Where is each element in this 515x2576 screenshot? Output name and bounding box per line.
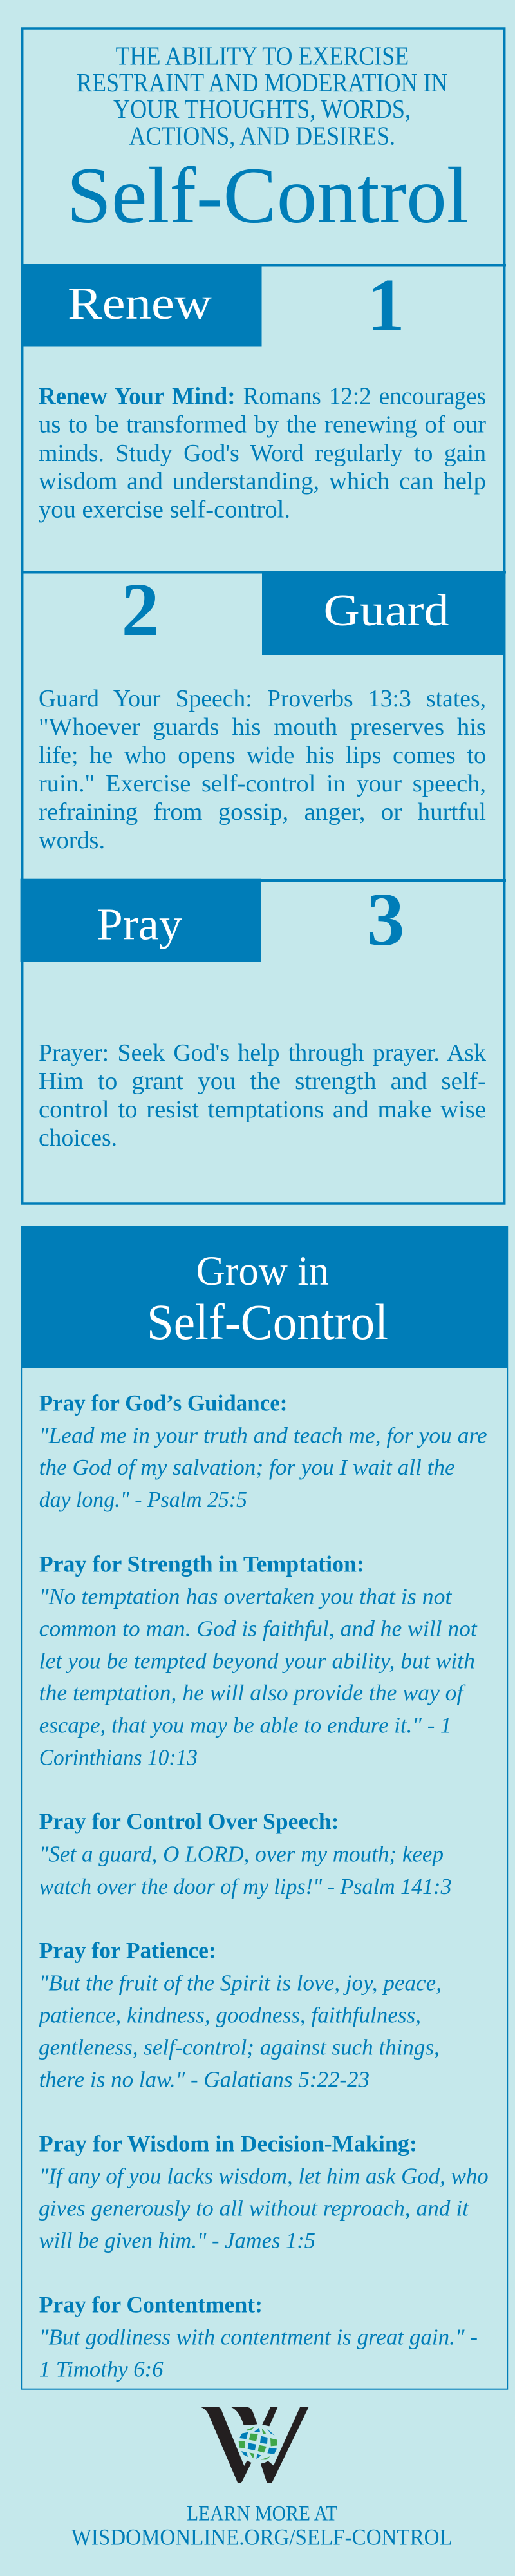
prayer: guidance: Pray for God’s Guidance: — [39, 1390, 287, 1416]
prayer: wisdom in decision-making: gives generously to all without reproach, and it — [39, 2196, 469, 2221]
prayer: guidance: "Lead me in your truth and teach me, for you are — [39, 1423, 487, 1448]
step 3 body text: choices. — [39, 1124, 117, 1151]
step 3 band: Pray — [21, 879, 261, 962]
prayer: strength in temptation: Corinthians 10:13 — [39, 1745, 198, 1770]
prayer: strength in temptation: escape, that you may be able to endure it." - 1 — [39, 1713, 451, 1738]
step 3 body text: Him to grant you the strength and self- — [39, 1068, 486, 1095]
prayer: control over speech: Pray for Control Over Speech: — [39, 1808, 339, 1834]
icon: Wisdom Online W and globe logo — [201, 2407, 308, 2483]
step 2 body text: words. — [39, 827, 105, 854]
step 2 band: Guard: Guard — [323, 586, 449, 636]
prayer: strength in temptation: "No temptation has overtaken you that is not — [39, 1584, 453, 1609]
step 2 body text: refraining from gossip, anger, or hurtful — [39, 799, 486, 826]
definition text: THE ABILITY TO EXERCISE — [116, 41, 409, 71]
prayer: control over speech — [39, 1808, 451, 1899]
definition text — [77, 41, 448, 151]
prayer: strength in temptation: Pray for Strength in Temptation: — [39, 1551, 364, 1577]
panel frame — [23, 28, 505, 1204]
prayer: guidance: the God of my salvation; for you I wait all the — [39, 1455, 455, 1480]
prayer: contentment — [39, 2292, 478, 2382]
prayer: wisdom in decision-making — [39, 2131, 489, 2253]
definition text: YOUR THOUGHTS, WORDS, — [113, 94, 411, 124]
definition text: ACTIONS, AND DESIRES. — [129, 121, 395, 151]
prayer: wisdom in decision-making: will be given him." - James 1:5 — [39, 2228, 315, 2253]
footer call to action: WISDOMONLINE.ORG/SELF-CONTROL — [71, 2524, 453, 2550]
step 3 body text: Prayer: Seek God's help through prayer. Ask — [39, 1039, 486, 1066]
prayer: contentment: "But godliness with contentment is great gain." - — [39, 2325, 478, 2350]
footer call to action — [71, 2503, 453, 2550]
prayer: patience: patience, kindness, goodness, faithfulness, — [37, 2003, 421, 2028]
prayer: patience: "But the fruit of the Spirit is love, joy, peace, — [39, 1971, 442, 1996]
step 2 body text: life; he who opens wide his lips comes to — [39, 742, 486, 769]
prayer: wisdom in decision-making: Pray for Wisdom in Decision-Making: — [39, 2131, 417, 2157]
prayer: patience: gentleness, self-control; against such things, — [39, 2035, 440, 2060]
step 3 band: Pray: Pray — [97, 900, 182, 949]
step 2 body text: "Whoever guards his mouth preserves his — [39, 714, 486, 741]
step 2 body text: ruin." Exercise self-control in your speech, — [39, 770, 486, 797]
prayer: patience — [37, 1938, 442, 2092]
panel frame — [21, 1226, 507, 2389]
prayer: patience: Pray for Patience: — [39, 1938, 216, 1964]
step 2 body text: Guard Your Speech: Proverbs 13:3 states, — [39, 685, 486, 712]
step 1 body text: Renew Your Mind: Romans 12:2 encourages — [39, 383, 486, 410]
divider 3 — [21, 879, 506, 882]
prayer: strength in temptation: common to man. God is faithful, and he will not — [39, 1616, 478, 1642]
step 1 number: 1 — [367, 264, 405, 347]
step 1 body text — [39, 383, 486, 524]
footer call to action: LEARN MORE AT — [187, 2503, 337, 2526]
prayer: wisdom in decision-making: "If any of you lacks wisdom, let him ask God, who — [39, 2164, 489, 2189]
step 2 body text — [39, 685, 486, 854]
divider 2 — [21, 571, 506, 573]
panel: self-control steps — [21, 28, 506, 1204]
step 1 body text: minds. Study God's Word regularly to gain — [39, 440, 486, 467]
panel header — [21, 1226, 508, 1368]
step 1 body text: you exercise self-control. — [39, 497, 290, 524]
step 3 number: 3 — [367, 877, 404, 961]
divider 1 — [21, 264, 506, 267]
step 3 body text — [39, 1039, 486, 1151]
step 1 band: Renew — [21, 264, 261, 346]
prayer: guidance: day long." - Psalm 25:5 — [39, 1487, 247, 1512]
prayer: contentment: Pray for Contentment: — [39, 2292, 263, 2318]
step 2 band: Guard — [262, 573, 503, 655]
prayer: strength in temptation: let you be tempted beyond your ability, but with — [39, 1649, 475, 1673]
prayer: strength in temptation — [39, 1551, 478, 1770]
step 1 body text: us to be transformed by the renewing of our — [39, 412, 486, 439]
prayer: guidance — [39, 1390, 487, 1512]
step 1 band: Renew: Renew — [68, 278, 212, 329]
prayer: patience: there is no law." - Galatians 5:22-23 — [39, 2067, 370, 2092]
prayer: control over speech: "Set a guard, O LORD, over my mouth; keep — [39, 1842, 444, 1866]
step 3 body text: control to resist temptations and make wise — [39, 1096, 486, 1123]
panel: grow in self-control — [21, 1226, 508, 2389]
panel header: Grow in — [196, 1248, 329, 1294]
prayer: strength in temptation: the temptation, he will also provide the way of — [39, 1680, 466, 1705]
prayer: control over speech: watch over the door of my lips!" - Psalm 141:3 — [39, 1874, 451, 1899]
title: Self-Control — [67, 151, 469, 240]
step 2 number: 2 — [121, 567, 160, 652]
panel header: Self-Control — [147, 1294, 388, 1350]
prayer: contentment: 1 Timothy 6:6 — [39, 2357, 164, 2382]
definition text: RESTRAINT AND MODERATION IN — [77, 68, 448, 97]
step 1 body text: wisdom and understanding, which can help — [39, 468, 486, 495]
